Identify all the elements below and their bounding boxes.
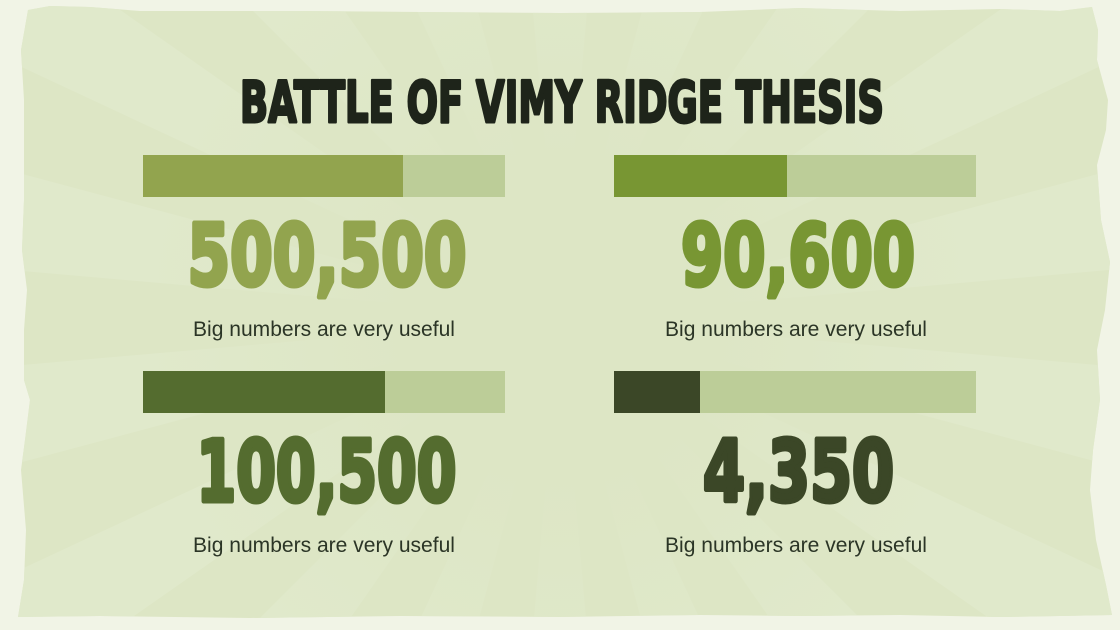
caption: Big numbers are very useful xyxy=(193,534,455,557)
caption: Big numbers are very useful xyxy=(193,318,455,341)
progress bar: 500,500 xyxy=(143,155,505,197)
caption: Big numbers are very useful xyxy=(665,318,927,341)
big number: 500,500: 500,500 xyxy=(188,207,466,306)
stat: 90,600 xyxy=(614,155,976,341)
stat: 4,350 xyxy=(614,371,976,557)
stat: 500,500 xyxy=(143,155,505,341)
progress bar: 4,350 xyxy=(614,371,976,413)
big number: 100,500: 100,500 xyxy=(196,423,456,522)
stat: 100,500 xyxy=(143,371,505,557)
progress bar: 100,500 xyxy=(143,371,505,413)
caption: Big numbers are very useful xyxy=(665,534,927,557)
big number: 4,350: 4,350 xyxy=(703,423,894,522)
big number: 90,600: 90,600 xyxy=(681,207,915,306)
progress bar: 90,600 xyxy=(614,155,976,197)
